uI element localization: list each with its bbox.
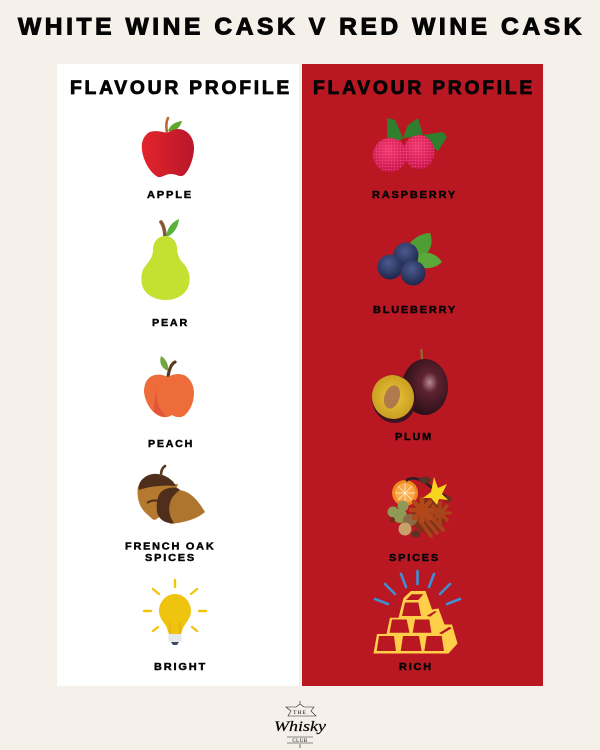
icon: spices xyxy=(388,476,452,538)
label: bright: BRIGHT xyxy=(154,662,207,673)
label: raspberry: RASPBERRY xyxy=(372,190,457,201)
logo: the whisky club: Whisky xyxy=(274,719,326,735)
logo: the whisky club xyxy=(274,701,326,748)
logo: the whisky club: THE xyxy=(293,710,307,716)
icon: pear xyxy=(141,219,190,300)
label: rich: RICH xyxy=(399,662,433,673)
icon: peach xyxy=(144,356,194,417)
labels: french oak spices: FRENCH OAK xyxy=(125,542,216,552)
icon: raspberries xyxy=(373,118,447,172)
logo: the whisky club: CLUB xyxy=(292,739,308,744)
label: plum: PLUM xyxy=(395,432,433,443)
label: apple: APPLE xyxy=(147,190,193,201)
panel: red wine cask xyxy=(302,64,543,686)
label: spices: SPICES xyxy=(389,553,440,564)
labels: french oak spices xyxy=(125,542,216,564)
labels: french oak spices: SPICES xyxy=(145,553,196,564)
label: blueberry: BLUEBERRY xyxy=(373,305,457,316)
icon: acorns xyxy=(137,466,205,524)
panel: white wine cask xyxy=(57,64,299,686)
icon: apple xyxy=(142,118,194,177)
label: peach: PEACH xyxy=(148,439,194,450)
heading: red wine flavour profile: FLAVOUR PROFILE xyxy=(313,78,535,99)
heading: white wine flavour profile: FLAVOUR PROFILE xyxy=(70,78,292,99)
title: WHITE WINE CASK V RED WINE CASK xyxy=(18,14,585,40)
icon: blueberries xyxy=(378,233,442,286)
icon: light bulb xyxy=(144,580,206,645)
icon: plum xyxy=(367,349,448,427)
icon: gold bars xyxy=(374,571,460,654)
label: pear: PEAR xyxy=(152,318,189,329)
